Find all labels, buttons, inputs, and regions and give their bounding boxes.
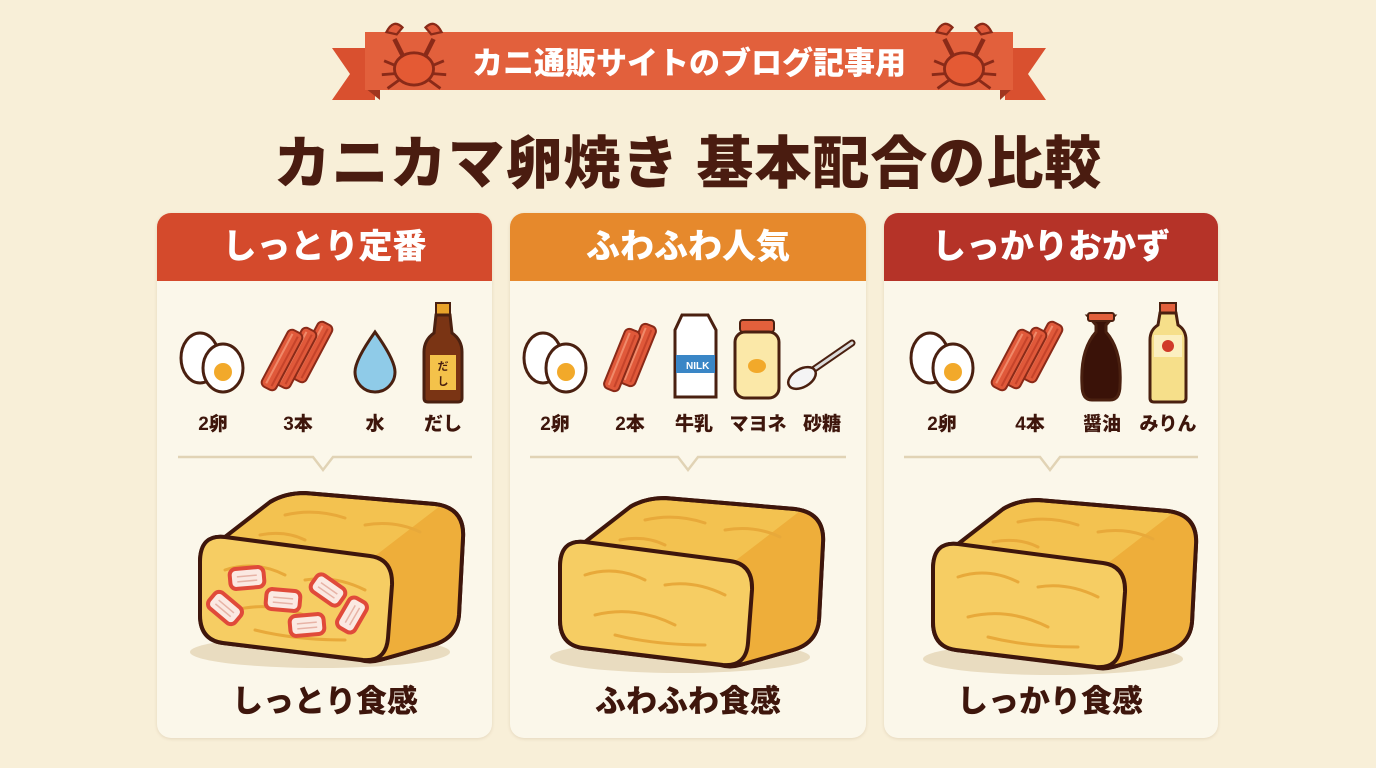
banner [332,22,1046,100]
ingredient labels: 3本 [283,413,313,435]
ingredient labels: マヨネ [729,413,787,435]
panel: しっとり定番 [157,213,492,738]
ingredient labels: 2本 [615,413,645,435]
panel header: しっとり定番 [222,228,426,266]
ingredient labels: だし [424,413,462,435]
icon: crab right [932,24,996,88]
ingredient labels [927,413,1197,435]
icon: soy sauce [1082,313,1120,400]
ingredient labels: 2卵 [927,413,957,435]
ingredient labels: 2卵 [540,413,570,435]
icon: sugar spoon [785,343,852,393]
icon: dashi bottle [424,303,462,402]
icon: mirin bottle [1150,303,1186,402]
ingredient labels [198,413,462,435]
icon: eggs [181,333,243,392]
icon: water drop [355,332,395,392]
panel header [157,213,492,281]
egg roll fluffy [550,498,823,673]
panel: ふわふわ人気 [510,213,866,738]
ribbon tails [332,48,1046,100]
ingredient labels: 2卵 [198,413,228,435]
ingredient labels: みりん [1139,413,1197,435]
ingredient labels: 砂糖 [803,413,841,435]
icon: milk carton [675,315,716,397]
panel: しっかりおかず [884,213,1218,738]
panel header [510,213,866,281]
panel header [884,213,1218,281]
icon: milk carton: NILK [686,361,710,372]
icon: crab left [382,24,446,88]
ingredient labels: 醤油 [1083,413,1121,435]
panel header: しっかりおかず [932,228,1170,266]
banner text: カニ通販サイトのブログ記事用 [472,46,906,81]
icon: crab sticks [990,320,1064,392]
ingredient labels [540,413,841,435]
ribbon main [365,32,1013,90]
panel header: ふわふわ人気 [586,228,790,266]
ingredient labels: 4本 [1015,413,1045,435]
icon: crab sticks [260,320,334,392]
icon: eggs [524,333,586,392]
icon: mayonnaise [735,320,779,398]
ingredient labels: 水 [365,413,385,435]
title: カニカマ卵焼き 基本配合の比較 [274,132,1102,196]
ingredient labels: 牛乳 [675,413,713,435]
icon: dashi bottle: だ [438,360,448,373]
egg roll with kanikama [190,493,463,668]
icon: crab sticks [603,322,657,393]
texture label: しっかり食感 [957,684,1143,719]
egg roll firm [923,500,1196,675]
icon: eggs [911,333,973,392]
texture label: しっとり食感 [232,684,418,719]
icon: dashi bottle: し [438,375,448,388]
texture label: ふわふわ食感 [595,684,781,719]
